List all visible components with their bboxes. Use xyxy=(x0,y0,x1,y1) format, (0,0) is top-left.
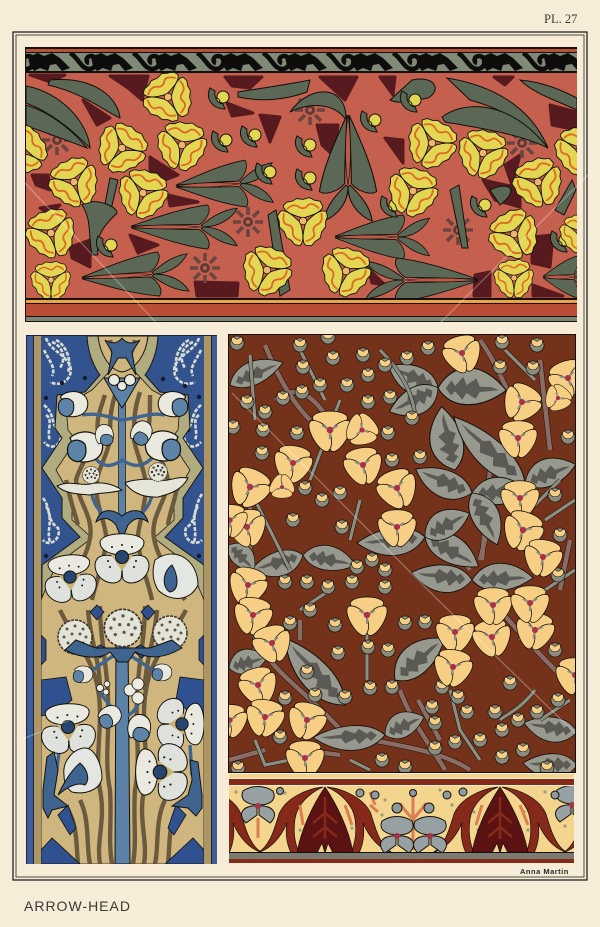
spade ornaments xyxy=(229,786,574,852)
side-view blossoms xyxy=(58,554,198,795)
white blossoms xyxy=(40,534,204,800)
gray blossoms xyxy=(242,786,588,853)
buds xyxy=(226,330,575,775)
panel: top frieze xyxy=(0,47,600,322)
watermark lines xyxy=(20,173,590,740)
frieze base stripes xyxy=(26,300,577,321)
thistle heads xyxy=(58,609,187,662)
arrow leaves xyxy=(81,115,590,302)
plate number: PL. 27 xyxy=(544,12,577,26)
rosettes xyxy=(42,95,537,283)
salmon sprigs xyxy=(258,792,528,850)
green leaves xyxy=(26,78,577,296)
lower border stripes xyxy=(229,774,574,785)
dark dots xyxy=(44,376,201,558)
yellow flowers xyxy=(26,73,577,298)
signature: Anna Martin xyxy=(520,867,569,876)
three pearl buds xyxy=(104,374,140,408)
stems xyxy=(118,403,126,514)
lower ornamental border xyxy=(229,786,574,852)
lower sprays xyxy=(43,752,202,818)
olive cartouche xyxy=(41,336,204,599)
gray leaves xyxy=(222,350,580,779)
wavy brown stripes xyxy=(60,340,186,864)
bud clusters xyxy=(96,88,571,257)
mauve stems xyxy=(229,340,575,770)
title: ARROW-HEAD xyxy=(24,898,131,914)
frieze floral field xyxy=(26,73,577,298)
border base stripes xyxy=(229,852,574,863)
top trident xyxy=(105,338,140,375)
small white balls xyxy=(96,678,144,704)
blue lozenges xyxy=(41,605,204,864)
white side blossoms xyxy=(57,463,188,497)
gray stems xyxy=(250,350,575,770)
cream flowers xyxy=(229,335,575,772)
cream border dots xyxy=(234,788,567,832)
frieze scroll band xyxy=(0,53,600,71)
maroon patches xyxy=(30,75,577,296)
panel: blue arrow-head column xyxy=(26,335,217,864)
tan body xyxy=(41,358,204,864)
gull leaves xyxy=(96,511,148,535)
white lace ornaments xyxy=(42,338,203,544)
blue buds xyxy=(58,391,188,743)
panel: brown arrow-head field xyxy=(228,334,576,863)
